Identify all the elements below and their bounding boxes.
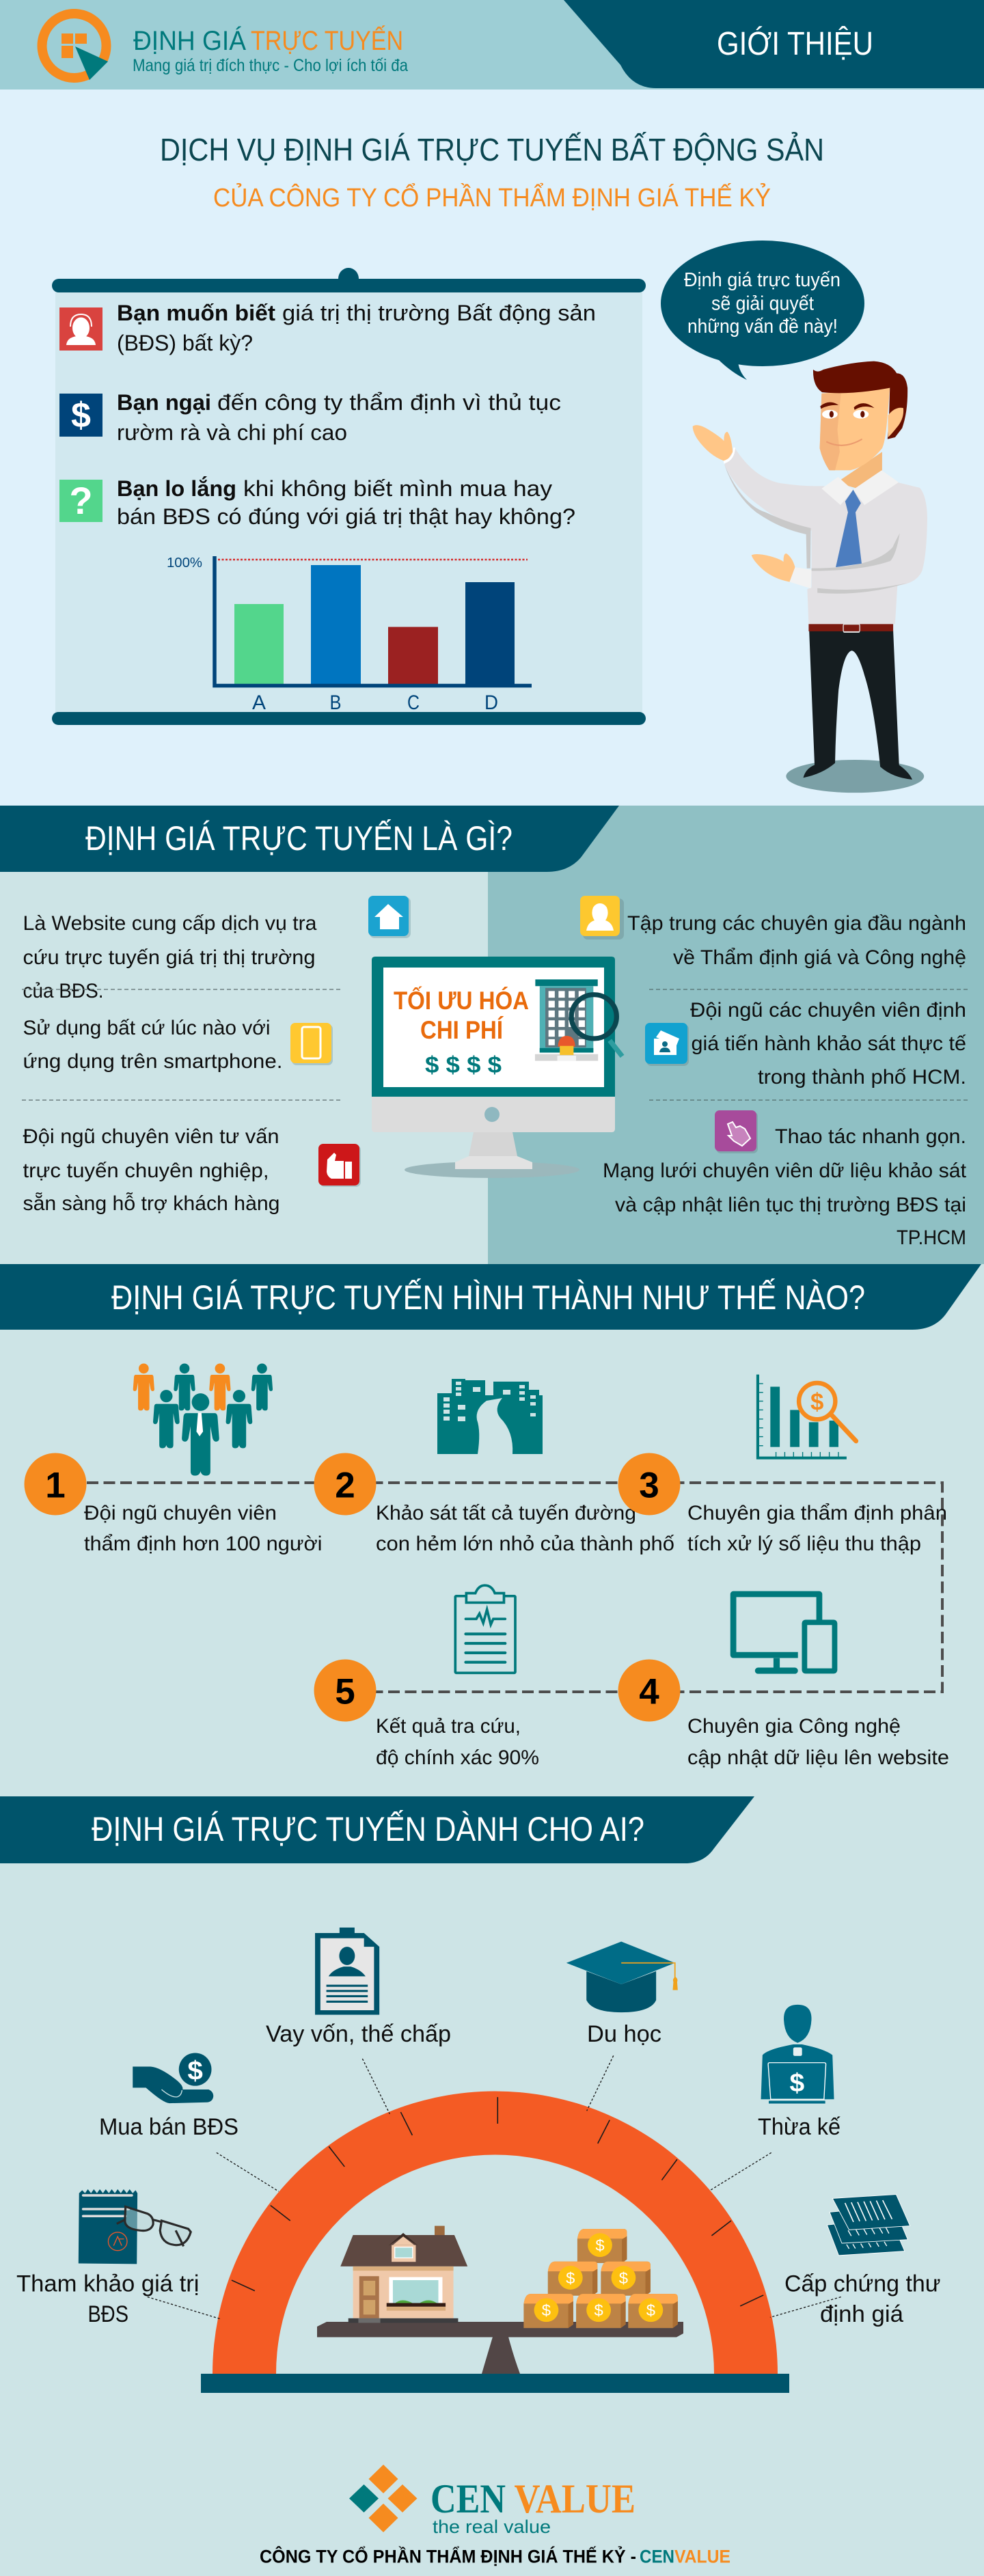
text block: right benefits: giá tiến hành khảo sát thực tế bbox=[692, 1032, 966, 1055]
footer company name: CÔNG TY CỔ PHẦN THẨM ĐỊNH GIÁ THẾ KỶ - bbox=[260, 2545, 636, 2566]
text block: left benefits: cứu trực tuyến giá trị thị trường bbox=[23, 946, 316, 969]
icon: hand with coin bbox=[133, 2053, 213, 2103]
audience: valuation certificate bbox=[784, 2195, 940, 2327]
step 1: 1 bbox=[45, 1465, 66, 1506]
audience: buying and selling: Mua bán BĐS bbox=[99, 2114, 238, 2140]
question 1 bbox=[117, 301, 596, 355]
text block: right benefits bbox=[603, 912, 968, 1249]
text block: left benefits: sẵn sàng hỗ trợ khách hàng bbox=[23, 1192, 280, 1215]
text block: right benefits: TP.HCM bbox=[897, 1227, 966, 1249]
icon: chart with magnifier bbox=[758, 1375, 856, 1458]
main title: DỊCH VỤ ĐỊNH GIÁ TRỰC TUYẾN BẤT ĐỘNG SẢN bbox=[160, 132, 824, 167]
icon: house tile bbox=[368, 896, 411, 938]
text block: right benefits: về Thẩm định giá và Công nghệ bbox=[673, 946, 966, 969]
icon: person with laptop bbox=[761, 2005, 834, 2104]
icon: support agent bbox=[59, 307, 102, 351]
text block: left benefits: Đội ngũ chuyên viên tư vấn bbox=[23, 1125, 279, 1148]
footer logo: the real value bbox=[433, 2517, 551, 2537]
bar chart: B bbox=[329, 691, 342, 714]
step 4: cập nhật dữ liệu lên website bbox=[687, 1746, 949, 1769]
text block: left benefits: Là Website cung cấp dịch vụ tra bbox=[23, 912, 317, 935]
text block: right benefits: Mạng lưới chuyên viên dữ liệu khảo sát bbox=[603, 1160, 967, 1182]
footer company name: CEN bbox=[640, 2546, 674, 2566]
bar chart: A bbox=[252, 691, 266, 714]
bar chart: D bbox=[484, 691, 498, 714]
icon: hand with coin: $ bbox=[187, 2056, 203, 2085]
header bar bbox=[0, 0, 984, 90]
section heading: how it formed: ĐỊNH GIÁ TRỰC TUYẾN HÌNH THÀNH NHƯ THẾ NÀO? bbox=[111, 1278, 865, 1317]
question 1: Bạn muốn biết bbox=[117, 301, 275, 325]
logo name bbox=[133, 25, 403, 56]
icon: money boxes bbox=[523, 2229, 678, 2328]
icon: touch tile bbox=[715, 1110, 758, 1153]
subtitle: CỦA CÔNG TY CỔ PHẦN THẨM ĐỊNH GIÁ THẾ KỶ bbox=[213, 182, 771, 213]
audience: study abroad: Du học bbox=[587, 2021, 661, 2047]
step 3: tích xử lý số liệu thu thập bbox=[687, 1533, 921, 1555]
audience: value reference: Tham khảo giá trị bbox=[16, 2271, 200, 2297]
step 3 bbox=[618, 1375, 947, 1555]
audience: buying and selling bbox=[99, 2053, 238, 2140]
step 2: 2 bbox=[335, 1465, 355, 1506]
footer logo: CEN bbox=[430, 2476, 506, 2521]
logo name: ĐỊNH GIÁ bbox=[133, 25, 246, 56]
icon: online valuation logo bbox=[42, 14, 108, 80]
icon: person with laptop: $ bbox=[789, 2069, 804, 2098]
section heading: what is it bbox=[0, 806, 619, 872]
gauge arc bbox=[148, 2055, 841, 2393]
footer company name: VALUE bbox=[674, 2546, 730, 2566]
screen text: CHI PHÍ bbox=[420, 1016, 504, 1044]
icon: notebook and glasses bbox=[79, 2189, 191, 2264]
logo name: TRỰC TUYẾN bbox=[251, 25, 403, 56]
question 3 bbox=[117, 476, 575, 529]
step 5: 5 bbox=[335, 1671, 355, 1712]
question 2: Bạn ngại bbox=[117, 390, 211, 415]
icon: expert tile bbox=[580, 896, 624, 940]
step 4: 4 bbox=[639, 1671, 659, 1712]
step 2: Khảo sát tất cả tuyến đường bbox=[376, 1502, 636, 1524]
question 2 bbox=[117, 390, 561, 445]
text block: right benefits: Thao tác nhanh gọn. bbox=[775, 1125, 966, 1148]
section heading: how it formed bbox=[0, 1264, 981, 1330]
audience: loan and mortgage: Vay vốn, thế chấp bbox=[266, 2021, 451, 2047]
screen text: $ $ $ $ bbox=[425, 1052, 502, 1078]
step 5 bbox=[314, 1585, 539, 1769]
text block: right benefits: trong thành phố HCM. bbox=[758, 1066, 966, 1088]
screen text: TỐI ƯU HÓA bbox=[394, 986, 529, 1015]
text block: left benefits: của BĐS. bbox=[23, 980, 104, 1002]
audience: valuation certificate: định giá bbox=[820, 2301, 903, 2327]
header section label: GIỚI THIỆU bbox=[717, 25, 873, 62]
step 1 bbox=[25, 1364, 323, 1555]
icon: smartphone tile bbox=[290, 1023, 333, 1065]
speech bubble: Định giá trực tuyến bbox=[684, 269, 840, 291]
panel: projection board with questions bbox=[52, 268, 646, 725]
icon: graduation cap bbox=[566, 1942, 678, 2012]
icon: four diamonds bbox=[349, 2465, 417, 2532]
step 1: thẩm định hơn 100 người bbox=[84, 1533, 323, 1555]
section 2 background panels bbox=[0, 806, 984, 1264]
text block: right benefits: và cập nhật liên tục thị trường BĐS tại bbox=[615, 1194, 966, 1216]
step 5: độ chính xác 90% bbox=[376, 1746, 539, 1769]
icon: field survey tile bbox=[645, 1023, 689, 1066]
question 3: Bạn lo lắng bbox=[117, 476, 236, 501]
audience: value reference bbox=[16, 2189, 200, 2327]
icon: dollar: $ bbox=[71, 396, 91, 435]
icon: dollar bbox=[59, 394, 102, 437]
section heading: what is it: ĐỊNH GIÁ TRỰC TUYẾN LÀ GÌ? bbox=[85, 819, 512, 858]
icon: city and road bbox=[437, 1379, 543, 1454]
question 1: giá trị thị trường Bất động sản bbox=[282, 301, 596, 325]
process dashed path bbox=[87, 1483, 942, 1692]
audience: inheritance: Thừa kế bbox=[758, 2114, 840, 2140]
icon: building under magnifier bbox=[535, 979, 623, 1061]
speech bubble bbox=[661, 241, 864, 380]
icon: question mark bbox=[59, 479, 102, 522]
icon: house bbox=[340, 2226, 467, 2323]
step 4: Chuyên gia Công nghệ bbox=[687, 1715, 901, 1738]
speech bubble: sẽ giải quyết bbox=[711, 292, 814, 314]
step 5: Kết quả tra cứu, bbox=[376, 1715, 521, 1738]
logo tagline: Mang giá trị đích thực - Cho lợi ích tối đa bbox=[133, 56, 408, 75]
icon: chart with magnifier: $ bbox=[810, 1388, 823, 1415]
audience: valuation certificate: Cấp chứng thư bbox=[784, 2271, 940, 2297]
question 2: đến công ty thẩm định vì thủ tục bbox=[217, 390, 561, 415]
footer logo: VALUE bbox=[514, 2476, 636, 2521]
text block: right benefits: Đội ngũ các chuyên viên định bbox=[690, 999, 966, 1022]
text block: left benefits: trực tuyến chuyên nghiệp, bbox=[23, 1160, 269, 1182]
bar chart bbox=[167, 556, 532, 714]
icon: thumbs up tile bbox=[318, 1144, 361, 1187]
bar chart: C bbox=[407, 691, 420, 714]
audience: inheritance bbox=[758, 2005, 840, 2140]
step 4 bbox=[618, 1594, 949, 1769]
text block: right benefits: Tập trung các chuyên gia đầu ngành bbox=[627, 912, 966, 935]
question 1: (BĐS) bất kỳ? bbox=[117, 331, 253, 355]
icon: profile document bbox=[315, 1928, 379, 2015]
text block: left benefits: ứng dụng trên smartphone. bbox=[23, 1050, 283, 1073]
audience: study abroad bbox=[566, 1942, 678, 2047]
speech bubble: những vấn đề này! bbox=[687, 316, 838, 338]
step 3: Chuyên gia thẩm định phân bbox=[687, 1502, 947, 1524]
question 3: bán BĐS có đúng với giá trị thật hay không? bbox=[117, 504, 575, 529]
icon: clipboard report bbox=[455, 1585, 515, 1673]
section heading: who it is for bbox=[0, 1796, 754, 1863]
question 2: rườm rà và chi phí cao bbox=[117, 420, 347, 445]
balance scale with house and money bbox=[317, 2226, 683, 2374]
audience: value reference: BĐS bbox=[87, 2301, 128, 2327]
text block: left benefits: Sử dụng bất cứ lúc nào với bbox=[23, 1017, 271, 1039]
icon: team of people bbox=[133, 1364, 273, 1476]
step 2 bbox=[314, 1379, 674, 1555]
audience: loan and mortgage bbox=[266, 1928, 451, 2047]
icon: stacked papers bbox=[827, 2195, 910, 2256]
question 3: khi không biết mình mua hay bbox=[243, 476, 552, 501]
footer logo bbox=[349, 2465, 636, 2537]
step 2: con hẻm lớn nhỏ của thành phố bbox=[376, 1533, 674, 1555]
icon: question mark: ? bbox=[69, 479, 93, 522]
icon: monitor and phone bbox=[733, 1594, 834, 1671]
screen text bbox=[394, 986, 529, 1078]
bar chart: 100% bbox=[167, 556, 202, 571]
illustration: businessman presenting bbox=[693, 361, 927, 793]
step 1: Đội ngũ chuyên viên bbox=[84, 1502, 277, 1524]
illustration: monitor with cost optimisation bbox=[372, 957, 623, 1178]
section heading: who it is for: ĐỊNH GIÁ TRỰC TUYẾN DÀNH CHO AI? bbox=[92, 1810, 644, 1848]
text block: left benefits bbox=[22, 912, 340, 1215]
step 3: 3 bbox=[639, 1465, 659, 1506]
